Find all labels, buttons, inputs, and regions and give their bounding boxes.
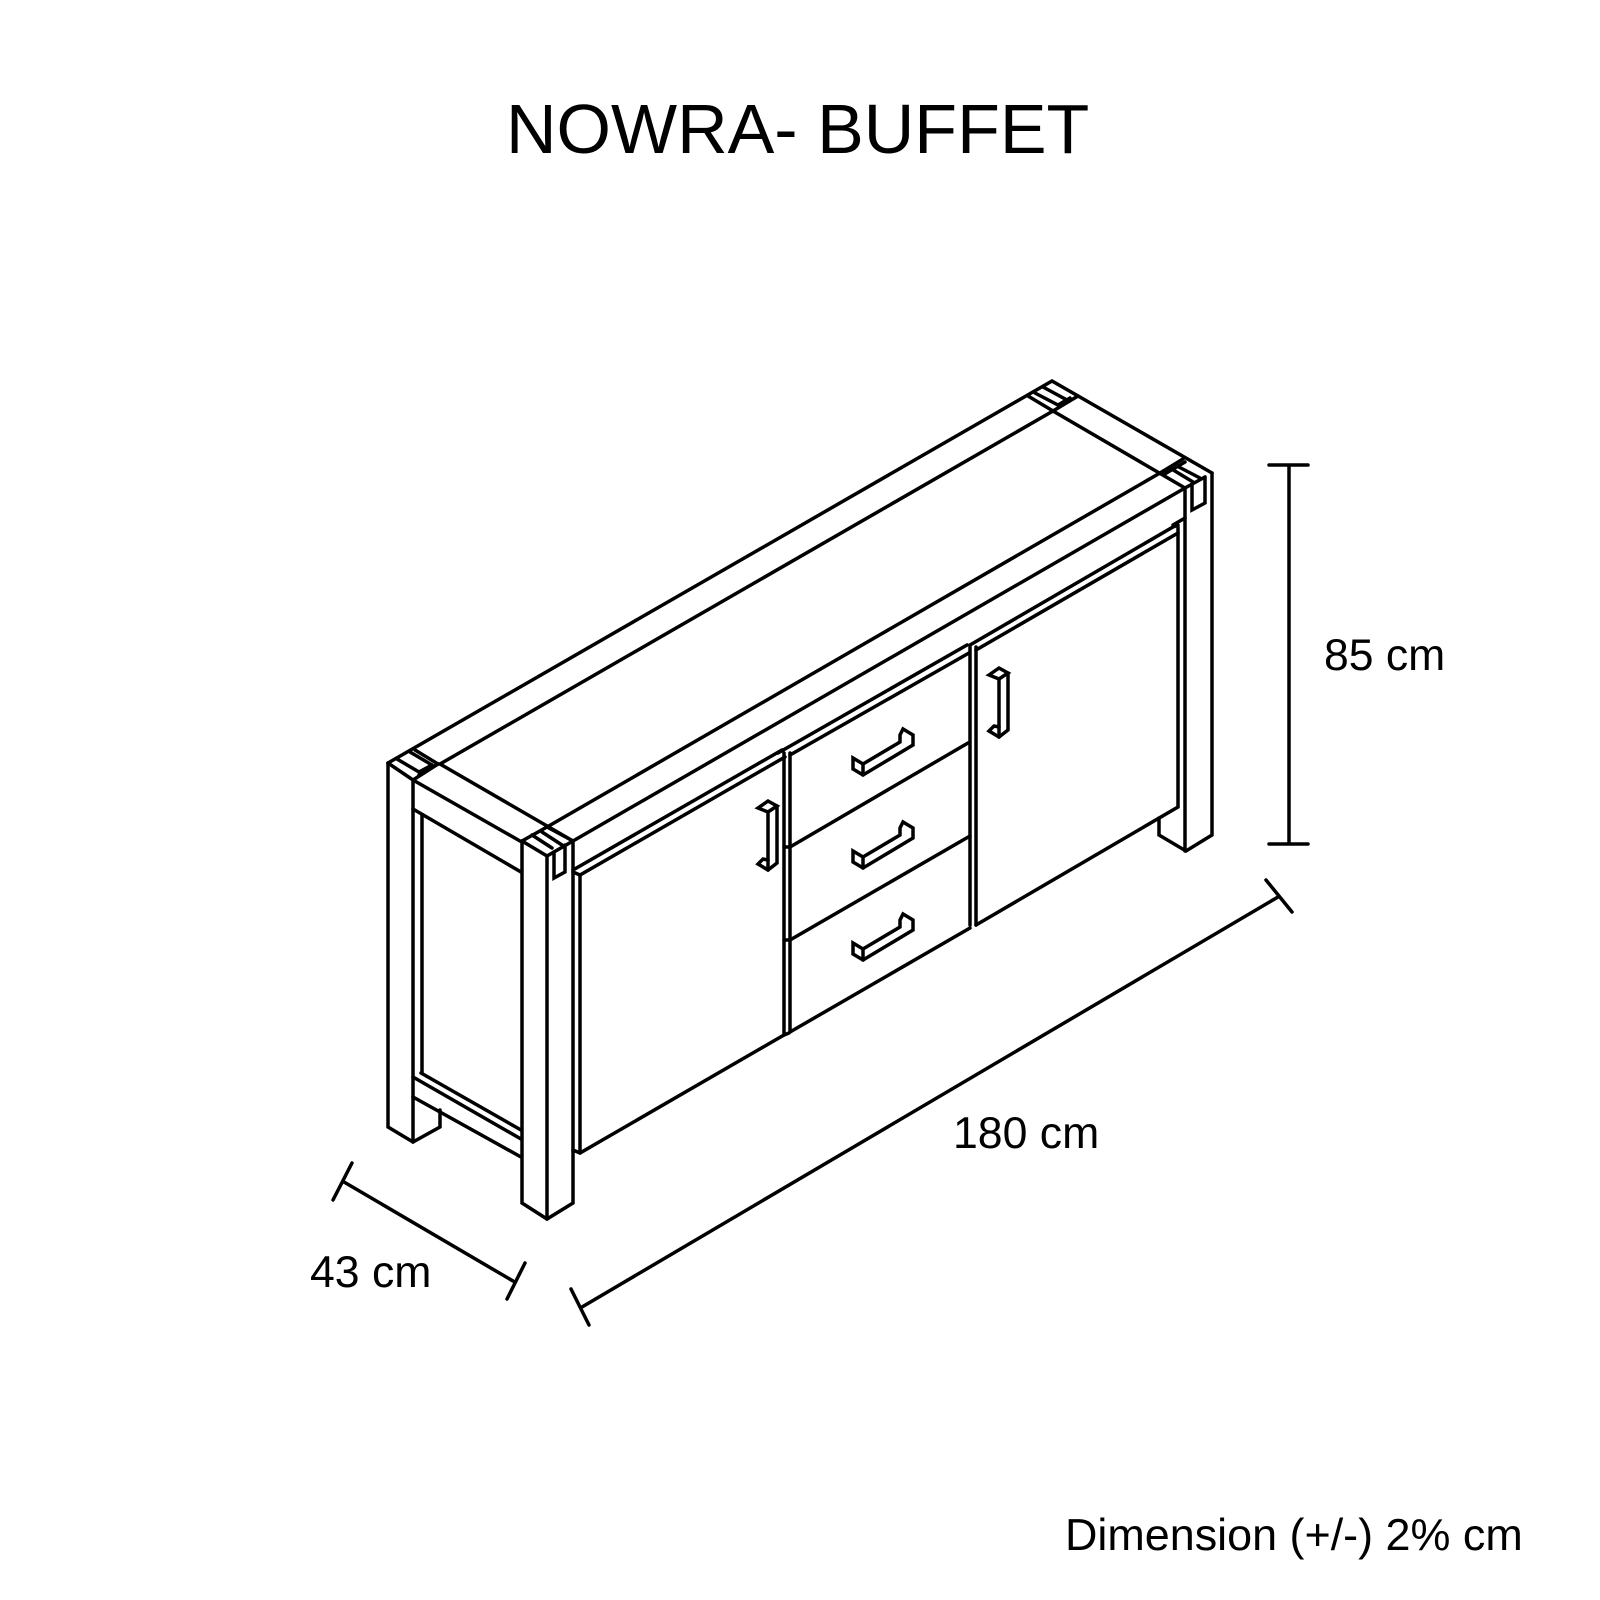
dimension: width 180 cm [571, 880, 1292, 1325]
front leg [522, 841, 573, 1219]
dimension: width 180 cm: 180 cm [953, 1109, 1099, 1158]
dimension: height 85 cm: 85 cm [1324, 631, 1445, 680]
drawer handle 1 [853, 729, 913, 775]
corner joint: right with tenon [1160, 459, 1205, 510]
right door [970, 518, 1185, 925]
dimension: height 85 cm [1269, 465, 1445, 844]
back left leg [388, 763, 440, 1142]
right door handle [989, 668, 1008, 737]
drawer handle 2 [853, 822, 913, 868]
left door [573, 750, 785, 1153]
buffet line drawing [388, 381, 1212, 1219]
dimension: depth 43 cm [310, 1163, 525, 1299]
tolerance note: Dimension (+/-) 2% cm [1065, 1509, 1523, 1560]
left door handle [758, 801, 777, 870]
right leg [1159, 473, 1212, 851]
corner joint: front with tenon [522, 827, 573, 878]
table top [388, 381, 1212, 841]
corner joint: back apex [1028, 387, 1078, 411]
title: NOWRA- BUFFET [506, 90, 1089, 168]
drawer handle 3 [853, 914, 913, 960]
corner joint: back left [388, 750, 438, 780]
dimension: depth 43 cm: 43 cm [310, 1248, 431, 1297]
side panel rails [413, 809, 521, 1157]
drawer section [778, 645, 976, 1035]
